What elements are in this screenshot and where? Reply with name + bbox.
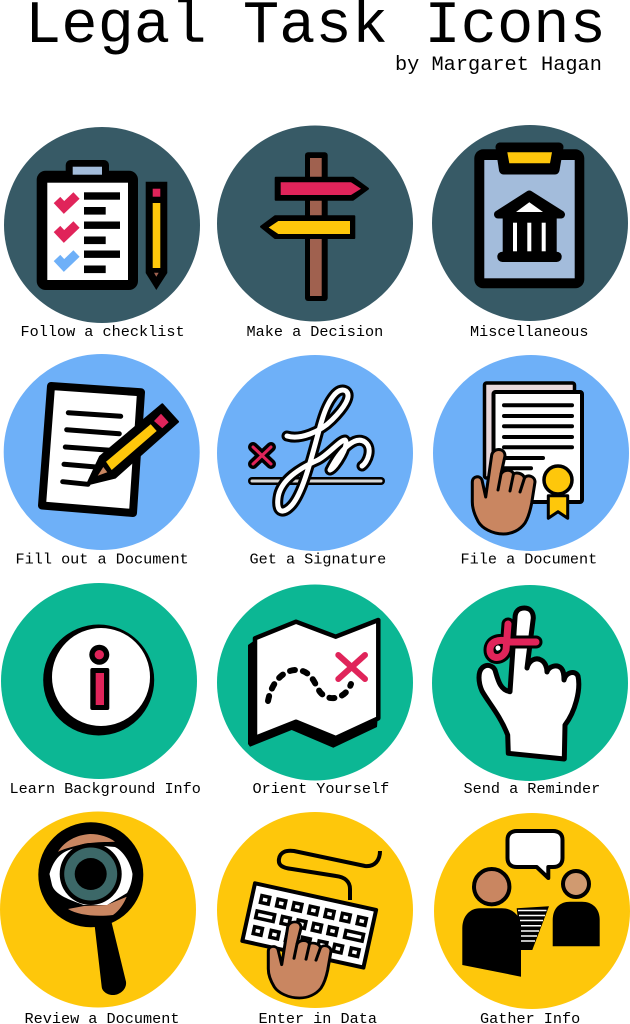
icon: gather info xyxy=(434,813,630,1009)
icon: enter in data xyxy=(217,812,413,1008)
label: orient yourself: Orient Yourself xyxy=(252,780,389,798)
icon: send a reminder xyxy=(432,585,628,781)
icon: make a decision xyxy=(217,126,413,322)
icon: get a signature xyxy=(217,355,413,551)
icon: review a document xyxy=(0,812,196,1008)
icon: fill out a document xyxy=(4,354,200,550)
label: get a signature: Get a Signature xyxy=(250,550,386,568)
icon: miscellaneous xyxy=(432,125,628,321)
icon: file a document xyxy=(433,355,629,551)
label: send a reminder: Send a Reminder xyxy=(464,780,600,798)
icon: orient yourself xyxy=(217,584,413,780)
icon: follow a checklist xyxy=(4,127,200,323)
label: file a document: File a Document xyxy=(460,550,597,568)
label: miscellaneous: Miscellaneous xyxy=(470,323,588,341)
label: learn background info: Learn Background Info xyxy=(10,780,201,798)
subtitle: by Margaret Hagan xyxy=(395,54,602,77)
label: follow a checklist: Follow a checklist xyxy=(20,323,185,341)
label: make a decision: Make a Decision xyxy=(246,323,383,341)
icon: learn background info xyxy=(1,583,197,779)
label: fill out a document: Fill out a Document xyxy=(16,550,189,568)
